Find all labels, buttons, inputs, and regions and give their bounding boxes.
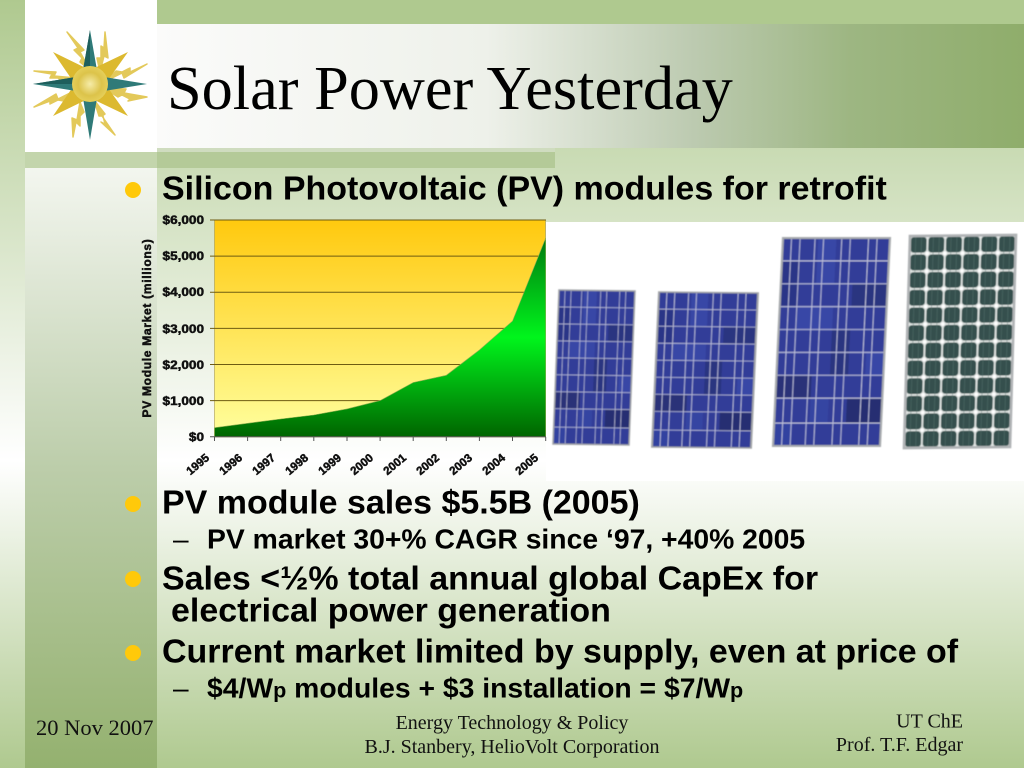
left column [25,168,157,768]
x axis labels: 2004 [481,452,508,478]
footer: center text: Energy Technology & Policy [396,712,628,734]
bullet: sales share of capex: electrical power generation [171,593,611,629]
top band [157,0,1024,24]
gridlines [210,220,546,401]
x axis labels: 2002 [415,452,442,478]
panel 1 [553,290,635,445]
photo backdrop: PV modules [546,222,1024,481]
y axis labels: $5,000 [163,249,204,263]
x axis labels: 2001 [382,452,409,478]
divider band [25,148,555,168]
x axis labels: 2005 [514,452,541,478]
bullet: PV module sales: PV module sales $5.5B (2005) [162,485,640,521]
star shading [33,30,90,84]
bullet: current market: Current market limited by supply, even at price of [162,634,959,670]
photo: solar panels [553,235,1016,448]
x axis labels: 2003 [448,452,475,478]
y axis labels: $6,000 [163,213,204,227]
title band [157,24,1024,148]
x axis labels: 1995 [185,452,212,478]
y axis labels [163,213,204,444]
gold diagonal rays [53,52,128,116]
footer: right text [836,710,963,756]
lightning rays [34,32,147,137]
y axis labels: $3,000 [163,322,204,336]
sub-bullet: PV market growth: PV market 30+% CAGR since ‘97, +40% 2005 [207,524,805,554]
plot background [214,220,546,437]
y axis labels: $2,000 [163,358,204,372]
logo panel [25,0,157,152]
y axis title: PV Module Market (millions) [140,239,154,417]
market area [214,238,546,437]
bar chart: PV module market area chart [140,213,546,478]
footer: right text: Prof. T.F. Edgar [836,734,963,756]
panel 4 [904,235,1016,448]
panel 2 [652,292,758,448]
y axis labels: $0 [189,430,204,444]
x axis labels: 1996 [218,452,245,478]
x axis [210,437,546,441]
title: Solar Power Yesterday [167,54,733,123]
footer: right text: UT ChE [896,710,963,732]
sub-bullet: price per watt: $4/Wp modules + $3 installation = $7/Wp [207,673,743,703]
y axis labels: $1,000 [163,394,204,408]
icon: solar compass logo [33,30,147,140]
sub-bullet: price per watt: – [173,672,189,704]
teal four-point star [33,30,147,140]
sub-bullet: PV market growth: – [173,524,189,554]
x axis labels: 2000 [349,452,376,478]
footer: center text: B.J. Stanbery, HelioVolt Corporation [365,736,659,758]
y axis labels: $4,000 [163,285,204,299]
x axis labels [185,452,541,478]
bullet: sales share of capex: Sales <½% total annual global CapEx for [162,561,818,597]
footer: center text [365,712,659,758]
bullet: sales share of capex [125,561,818,629]
x axis labels: 1997 [251,452,278,478]
x axis labels: 1999 [317,452,344,478]
panel 3 [773,238,890,446]
sun disc [72,66,108,102]
x axis labels: 1998 [284,452,311,478]
bullet: silicon PV modules: Silicon Photovoltaic (PV) modules for retrofit [162,171,887,207]
footer: date: 20 Nov 2007 [36,715,154,740]
